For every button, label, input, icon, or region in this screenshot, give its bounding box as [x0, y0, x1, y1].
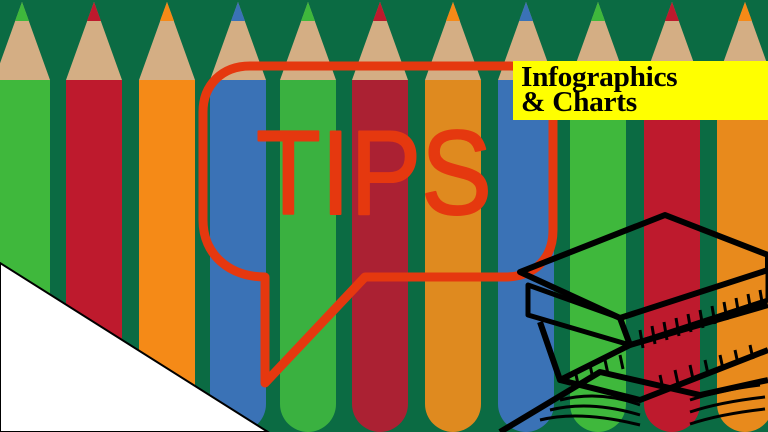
speech bubble	[203, 66, 553, 383]
title box: Infographics	[521, 62, 677, 93]
books illustration	[500, 215, 768, 432]
title box	[513, 61, 768, 120]
white triangle	[0, 263, 268, 432]
TIPS text: TIPS	[256, 106, 492, 240]
title box: & Charts	[521, 87, 637, 118]
